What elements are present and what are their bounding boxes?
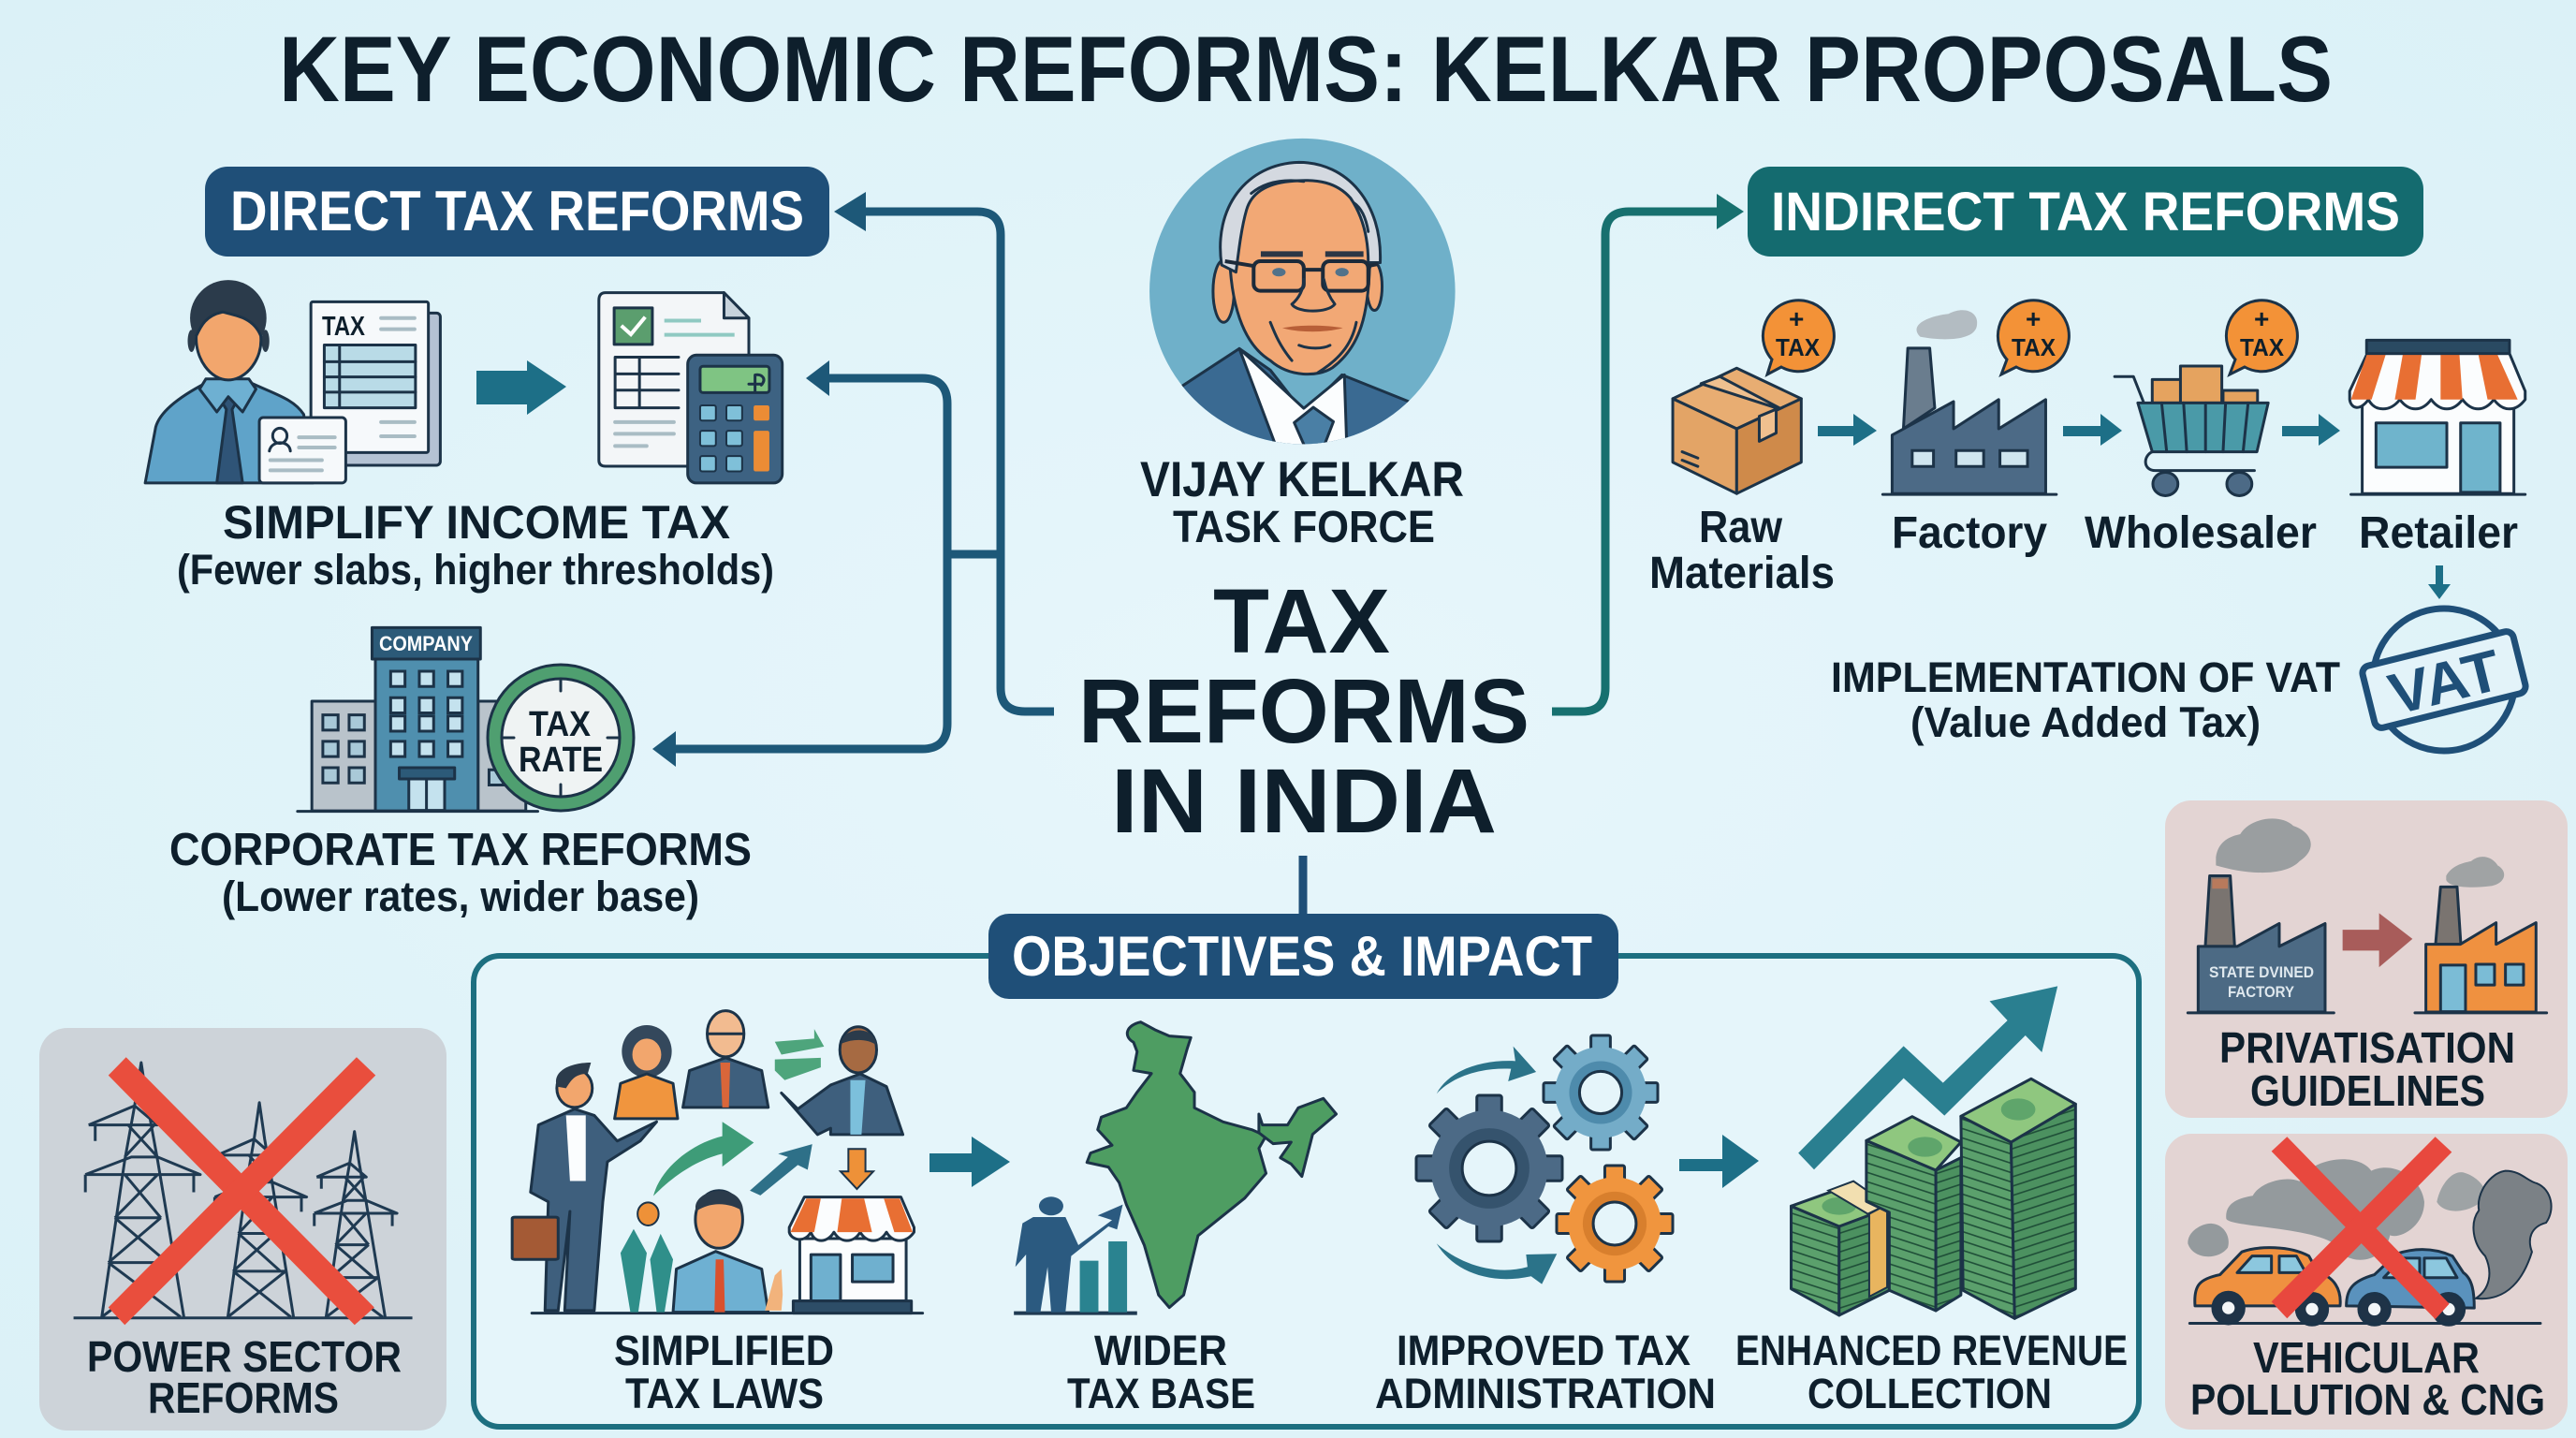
- tax bubble 3: +: [2254, 304, 2269, 333]
- labels: supply chain stages: Wholesaler: [2085, 508, 2317, 558]
- arrow: factory to wholesaler: [2063, 414, 2122, 446]
- text: corporate tax reforms: (Lower rates, wider base): [222, 873, 699, 920]
- badge: direct tax reforms: DIRECT TAX REFORMS: [230, 180, 804, 242]
- labels: objectives: TAX LAWS: [625, 1370, 824, 1417]
- icon: people, shop and simplified laws: [512, 1011, 923, 1313]
- icon: VAT stamp: VAT: [2382, 638, 2508, 727]
- tax bubble 2: +: [2026, 304, 2041, 333]
- tax bubble 2: [1998, 301, 2069, 374]
- badge: direct tax reforms: [205, 167, 829, 257]
- central heading: tax reforms in India: [1078, 570, 1530, 852]
- panel: objectives and impact: [474, 914, 2139, 1427]
- panel: VAT supply chain: [1649, 301, 2525, 598]
- labels: objectives: COLLECTION: [1808, 1370, 2052, 1417]
- labels: supply chain stages: Factory: [1892, 508, 2047, 558]
- icon: retailer shop: [2349, 340, 2525, 494]
- tax bubble 2: TAX: [2012, 333, 2056, 361]
- text: corporate tax reforms: CORPORATE TAX REFORMS: [169, 825, 752, 875]
- tax bubble 1: +: [1789, 304, 1804, 333]
- icon: crossed-out polluting cars: [2188, 1137, 2552, 1325]
- arrow: wholesaler to retailer: [2282, 414, 2340, 446]
- labels: objectives: ENHANCED REVENUE: [1735, 1327, 2128, 1374]
- arrow: retailer to VAT: [2428, 565, 2451, 599]
- text: Vijay Kelkar task force: TASK FORCE: [1173, 503, 1435, 552]
- labels: supply chain stages: Materials: [1649, 549, 1835, 598]
- icon: company building with tax rate dial: RATE: [519, 741, 603, 780]
- badge: objectives and impact: OBJECTIVES & IMPACT: [1012, 925, 1592, 988]
- title: KEY ECONOMIC REFORMS: KELKAR PROPOSALS: [279, 17, 2333, 121]
- panel: privatisation guidelines: GUIDELINES: [2250, 1066, 2485, 1115]
- labels: objectives: [614, 1327, 2128, 1417]
- panel: privatisation guidelines: PRIVATISATION: [2219, 1023, 2515, 1072]
- tax bubble 1: TAX: [1776, 333, 1821, 361]
- badge: indirect tax reforms: INDIRECT TAX REFORMS: [1771, 182, 2400, 242]
- icon: raw materials box: [1673, 368, 1801, 493]
- icon: taxpayer with tax form: [145, 280, 440, 483]
- panel: power sector reforms: REFORMS: [148, 1373, 339, 1422]
- icon: gears: [1416, 1035, 1673, 1284]
- central heading: tax reforms in India: TAX: [1213, 570, 1390, 672]
- label: TAX on form: TAX: [322, 312, 366, 342]
- icon: factory: [1882, 310, 2056, 494]
- arrow: box to factory: [1818, 414, 1877, 446]
- panel: vehicular pollution and CNG: VEHICULAR: [2253, 1333, 2480, 1382]
- text: Vijay Kelkar task force: VIJAY KELKAR: [1140, 452, 1464, 507]
- labels: objectives: SIMPLIFIED: [614, 1327, 834, 1374]
- tax bubble 1: [1763, 301, 1834, 374]
- portrait: Vijay Kelkar: [1149, 139, 1456, 465]
- panel: power sector reforms: [39, 1028, 446, 1431]
- icon: state factory to private factory: [2188, 818, 2547, 1013]
- labels: supply chain stages: [1649, 503, 2518, 598]
- text: implementation of VAT: (Value Added Tax): [1910, 698, 2261, 746]
- text: Vijay Kelkar task force: [1140, 452, 1464, 552]
- icon: VAT stamp: [2351, 592, 2537, 768]
- text: corporate tax reforms: [169, 825, 752, 920]
- text: simplify income tax: [177, 496, 774, 594]
- text: implementation of VAT: [1831, 653, 2340, 746]
- icon: document and calculator: [599, 293, 783, 483]
- arrow: tax form to calculator: [476, 360, 566, 415]
- icon: crossed-out power pylons: [74, 1057, 413, 1325]
- text: simplify income tax: (Fewer slabs, higher thresholds): [177, 546, 774, 594]
- tax bubble 3: [2226, 301, 2297, 374]
- badge: indirect tax reforms: [1748, 167, 2423, 257]
- icon: company building with tax rate dial: [298, 627, 634, 812]
- icon: wholesaler cart: [2115, 366, 2268, 495]
- tax bubble 3: TAX: [2240, 333, 2285, 361]
- labels: supply chain stages: Retailer: [2359, 508, 2518, 558]
- panel: privatisation guidelines: [2165, 800, 2568, 1118]
- icon: company building with tax rate dial: TAX: [529, 705, 592, 744]
- arrow: gears to revenue: [1679, 1135, 1759, 1188]
- panel: privatisation guidelines: STATE DVINED: [2209, 963, 2314, 981]
- panel: privatisation guidelines: FACTORY: [2228, 983, 2295, 1001]
- icon: company building with tax rate dial: COMPANY: [379, 632, 473, 655]
- labels: objectives: TAX BASE: [1067, 1370, 1255, 1417]
- connector: centre to direct tax reforms: [652, 192, 1303, 914]
- text: implementation of VAT: IMPLEMENTATION OF VAT: [1831, 653, 2340, 701]
- panel: vehicular pollution and CNG: [2165, 1134, 2568, 1430]
- central heading: tax reforms in India: REFORMS: [1078, 660, 1530, 762]
- labels: supply chain stages: Raw: [1699, 503, 1783, 552]
- labels: objectives: ADMINISTRATION: [1375, 1370, 1716, 1417]
- arrow: simplified laws to wider base: [929, 1137, 1010, 1187]
- panel: power sector reforms: POWER SECTOR: [87, 1332, 402, 1381]
- central heading: tax reforms in India: IN INDIA: [1111, 750, 1497, 852]
- icon: money stacks with rising arrow: [1792, 986, 2075, 1318]
- labels: objectives: WIDER: [1094, 1327, 1227, 1374]
- badge: objectives and impact: [988, 914, 1618, 999]
- connector: centre to indirect tax reforms: [1552, 194, 1744, 712]
- icon: India map with growth chart: [1014, 1022, 1337, 1313]
- labels: objectives: IMPROVED TAX: [1397, 1327, 1690, 1374]
- text: simplify income tax: SIMPLIFY INCOME TAX: [223, 496, 730, 549]
